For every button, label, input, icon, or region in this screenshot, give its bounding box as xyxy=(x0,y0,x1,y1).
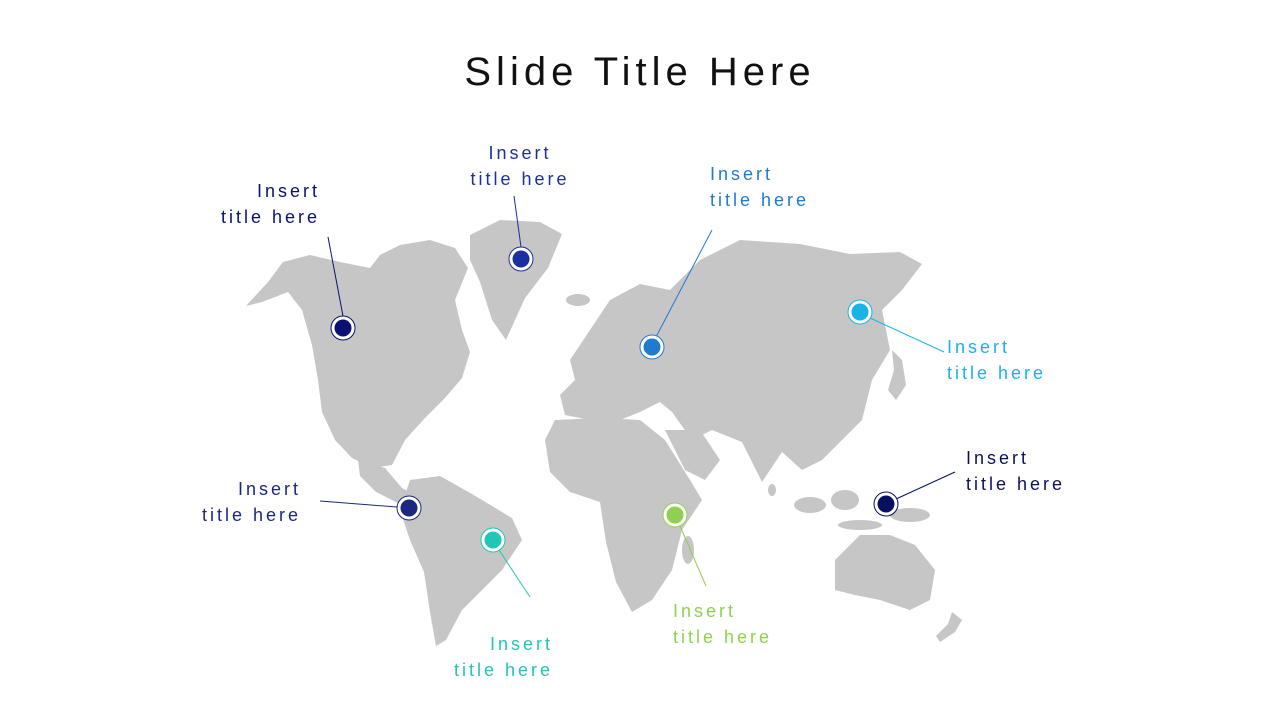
title: Slide Title Here xyxy=(464,50,816,94)
marker: south america west: title here xyxy=(202,505,301,525)
marker: africa xyxy=(663,503,772,647)
marker: europe: Insert xyxy=(710,164,773,184)
uk xyxy=(588,334,606,365)
marker: southeast asia: Insert xyxy=(966,448,1029,468)
marker: southeast asia xyxy=(874,448,1065,516)
central america xyxy=(358,460,420,510)
japan xyxy=(888,350,906,400)
australia xyxy=(835,535,935,610)
iceland xyxy=(566,294,590,306)
marker: greenland: title here xyxy=(470,169,570,189)
marker: russia xyxy=(848,300,1046,383)
madagascar xyxy=(682,536,694,564)
south america xyxy=(400,476,522,646)
marker: greenland: Insert xyxy=(488,143,552,163)
arabia xyxy=(665,430,720,480)
world map xyxy=(246,220,962,646)
marker: canada: title here xyxy=(221,207,320,227)
marker: south america west: Insert xyxy=(238,479,301,499)
marker: africa: Insert xyxy=(673,601,736,621)
marker: brazil xyxy=(454,528,553,680)
north america xyxy=(246,240,470,468)
marker: russia: title here xyxy=(947,363,1046,383)
marker: south america west xyxy=(202,479,421,525)
new zealand xyxy=(936,612,962,642)
greenland xyxy=(470,220,562,340)
marker: europe xyxy=(640,164,809,359)
indonesia xyxy=(794,497,826,513)
africa xyxy=(545,418,702,612)
marker: brazil: Insert xyxy=(490,634,553,654)
marker: greenland xyxy=(470,143,570,271)
marker: europe: title here xyxy=(710,190,809,210)
europe & asia xyxy=(560,240,922,482)
marker: russia: Insert xyxy=(947,337,1010,357)
marker: brazil: title here xyxy=(454,660,553,680)
marker: canada xyxy=(221,181,355,340)
sri lanka xyxy=(768,484,776,496)
marker: southeast asia: title here xyxy=(966,474,1065,494)
marker: africa: title here xyxy=(673,627,772,647)
marker: canada: Insert xyxy=(257,181,320,201)
